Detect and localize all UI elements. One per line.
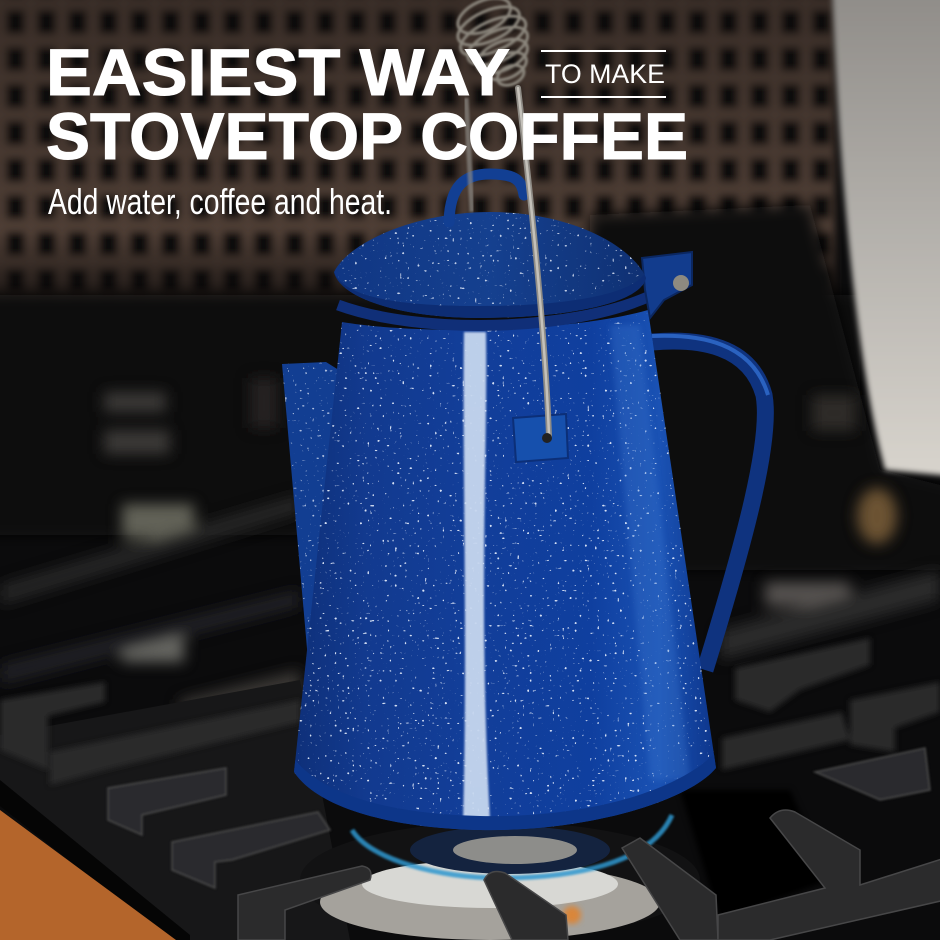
wooden counter (0, 810, 176, 940)
to make tag (541, 50, 666, 98)
front grates (238, 810, 940, 940)
bracket (513, 414, 568, 462)
icon: coffee pot (282, 0, 768, 840)
pot rim (338, 296, 650, 325)
lid knob (449, 174, 524, 222)
lid hinge (642, 252, 692, 318)
pot handle (652, 336, 768, 670)
wire coil grip (446, 0, 546, 98)
subtitle: Add water, coffee and heat. (48, 181, 392, 222)
title (46, 35, 688, 222)
pot spout (282, 362, 337, 650)
near grates (108, 748, 930, 888)
heading line 1: EASIEST WAY (46, 35, 510, 109)
far grates (0, 638, 940, 785)
heading line 2: STOVETOP COFFEE (46, 99, 688, 173)
pot body (290, 300, 720, 840)
blurred stove highlights (0, 378, 940, 730)
stovetop and grates (0, 638, 940, 940)
wire lifter handle (518, 88, 549, 436)
back wire (466, 98, 472, 212)
dark burner well (680, 790, 830, 920)
to make tag: TO MAKE (545, 59, 665, 89)
pot lid (334, 212, 646, 318)
burner flame (300, 815, 700, 940)
